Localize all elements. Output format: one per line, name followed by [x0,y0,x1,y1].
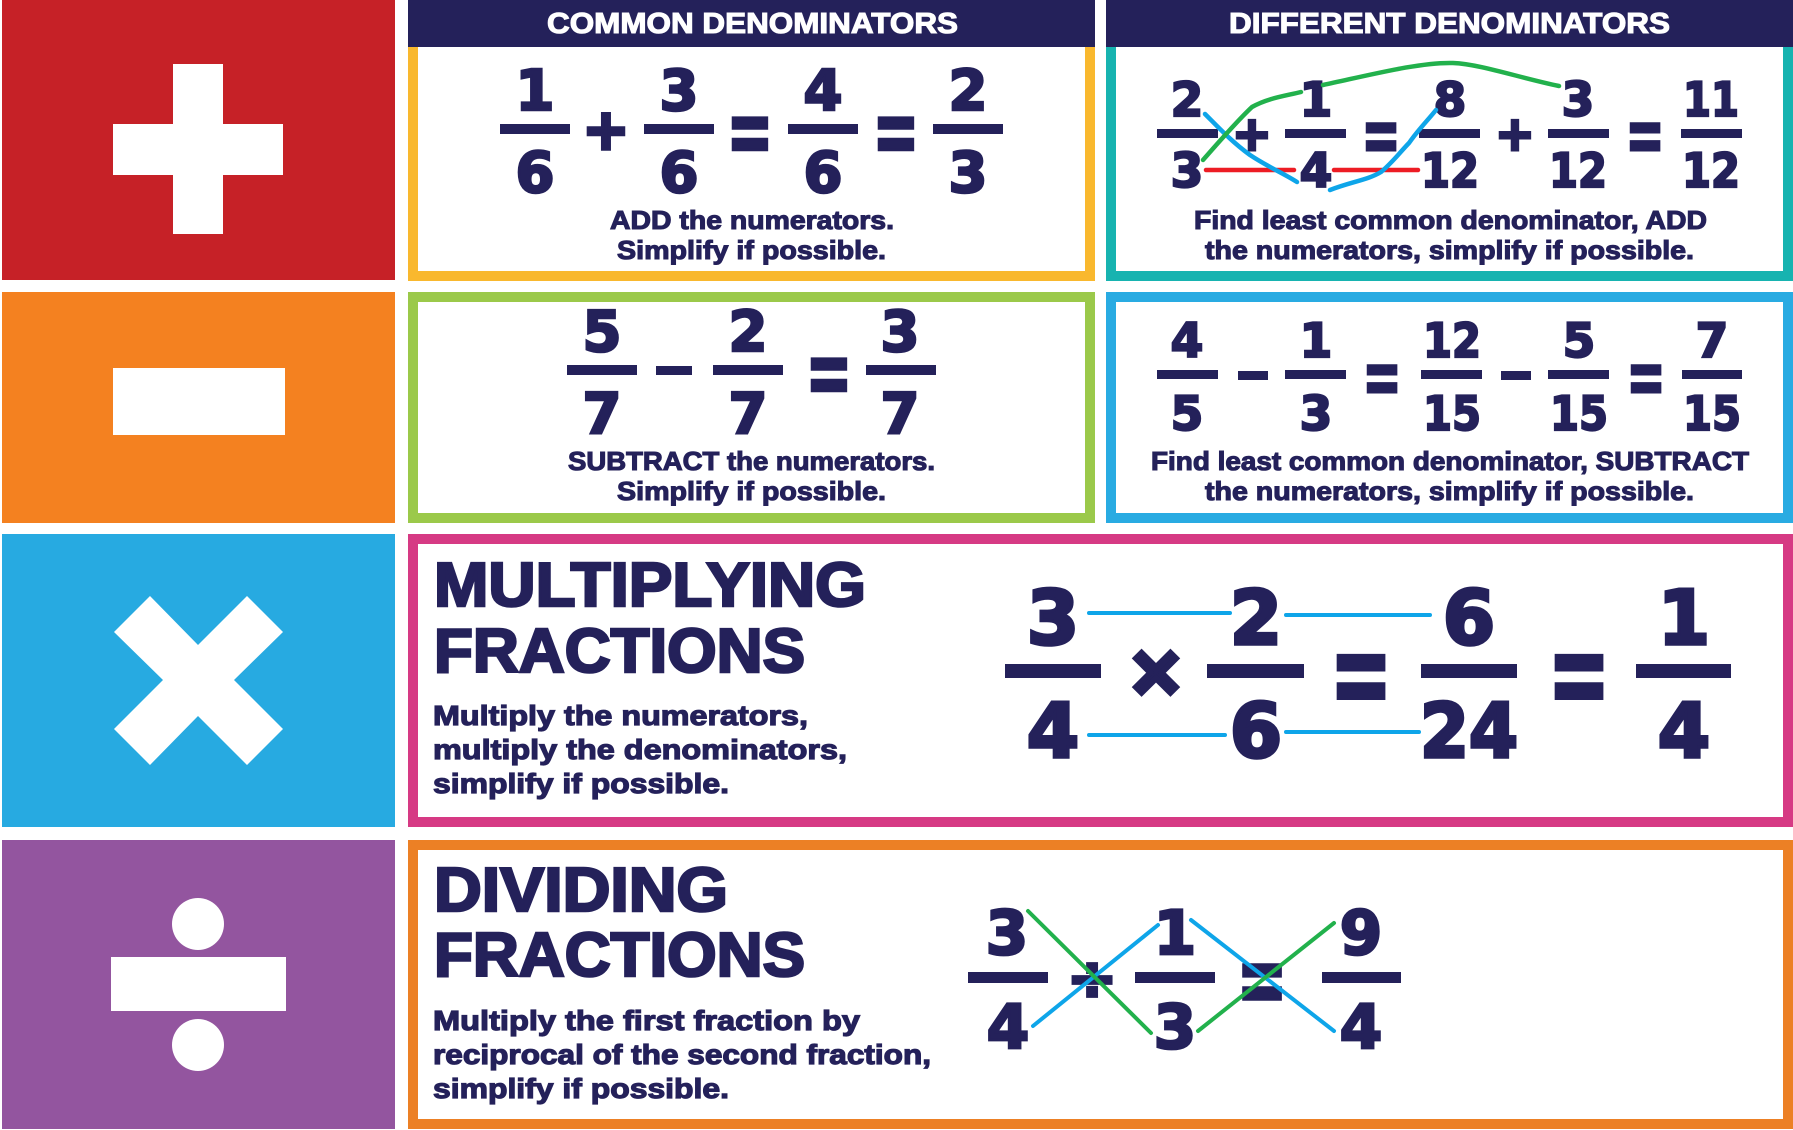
equation: 4/5 - 1/3 = 12/15 - 5/15 = 7/15: 5 [1563,314,1595,369]
equation: 3/4 x 2/6 = 6/24 = 1/4: 2 [1230,574,1282,662]
equation: 2/3 + 1/4 = 8/12 + 3/12 = 11/12: 1 [1300,73,1332,128]
equation: 3/4 x 2/6 = 6/24 = 1/4: 6 [1443,574,1495,662]
caption: different denominators subtract instructions: Find least common denominator, SUBTRACT [1151,446,1749,476]
equation: 2/3 + 1/4 = 8/12 + 3/12 = 11/12: + [1232,107,1272,162]
equation: 1/6 + 3/6 = 4/6 = 2/3: 6 [804,141,842,206]
caption: different denominators add instructions [1194,205,1707,265]
panel: addition symbol [2,0,395,280]
equation: 1/6 + 3/6 = 4/6 = 2/3: + [583,98,629,163]
equation: 3/4 ÷ 1/3 = 9/4: ÷ [1066,943,1118,1014]
panel: subtraction symbol [2,292,395,523]
annotation: cross-multiplication lines [1028,911,1334,1033]
panel: dividing fractions [413,840,1793,1129]
equation: 5/7 - 2/7 = 3/7: = [806,318,852,428]
equation: 4/5 - 1/3 = 12/15 - 5/15 = 7/15: 7 [1696,314,1728,369]
text: multiplying instructions: multiply the denominators, [433,734,847,765]
equation: 3/4 x 2/6 = 6/24 = 1/4: = [1548,599,1610,747]
header: common denominators [408,0,1095,47]
equation: 3/4 x 2/6 = 6/24 = 1/4: 1 [1658,574,1710,662]
equation: 2/3 + 1/4 = 8/12 + 3/12 = 11/12: 3 [1171,144,1203,199]
caption: different denominators add instructions: Find least common denominator, ADD [1194,205,1707,235]
header: different denominators [1106,0,1793,47]
heading: dividing fractions: DIVIDING [434,856,728,925]
equation: 2/3 + 1/4 = 8/12 + 3/12 = 11/12: 12 [1549,144,1607,199]
equation: 2/3 + 1/4 = 8/12 + 3/12 = 11/12: 12 [1421,144,1479,199]
equation: 2/3 + 1/4 = 8/12 + 3/12 = 11/12 [1157,73,1742,199]
equation: 3/4 ÷ 1/3 = 9/4 [968,898,1401,1063]
equation: 2/3 + 1/4 = 8/12 + 3/12 = 11/12: 3 [1562,73,1594,128]
equation: 3/4 ÷ 1/3 = 9/4: 4 [987,992,1029,1063]
equation: 1/6 + 3/6 = 4/6 = 2/3: 3 [949,141,987,206]
equation: 5/7 - 2/7 = 3/7: 3 [881,300,919,365]
equation: 3/4 x 2/6 = 6/24 = 1/4: 24 [1420,687,1518,775]
panel: division symbol [2,840,395,1129]
equation: 3/4 x 2/6 = 6/24 = 1/4: × [1128,632,1184,711]
equation: 1/6 + 3/6 = 4/6 = 2/3: = [727,77,773,187]
equation: 4/5 - 1/3 = 12/15 - 5/15 = 7/15: 15 [1683,387,1741,442]
equation: 2/3 + 1/4 = 8/12 + 3/12 = 11/12: 11 [1683,73,1739,128]
text: multiplying instructions: Multiply the numerators, [433,700,808,731]
equation: 1/6 + 3/6 = 4/6 = 2/3: 2 [949,59,987,124]
equation: 4/5 - 1/3 = 12/15 - 5/15 = 7/15: 5 [1171,387,1203,442]
text: multiplying instructions [433,700,847,799]
equation: 3/4 x 2/6 = 6/24 = 1/4: 3 [1027,574,1079,662]
equation: 4/5 - 1/3 = 12/15 - 5/15 = 7/15: 4 [1171,314,1203,369]
equation: 4/5 - 1/3 = 12/15 - 5/15 = 7/15: 12 [1423,314,1481,369]
equation: 4/5 - 1/3 = 12/15 - 5/15 = 7/15 [1157,314,1742,442]
caption: subtract instructions: SUBTRACT the numerators. [568,446,935,476]
caption: different denominators add instructions: the numerators, simplify if possible. [1205,235,1694,265]
annotation: straight multiplication lines [1089,613,1430,735]
equation: 2/3 + 1/4 = 8/12 + 3/12 = 11/12: 2 [1171,73,1203,128]
equation: 3/4 ÷ 1/3 = 9/4: = [1236,919,1288,1040]
equation: 2/3 + 1/4 = 8/12 + 3/12 = 11/12: = [1625,89,1665,181]
equation: 1/6 + 3/6 = 4/6 = 2/3: 1 [516,59,554,124]
equation: 3/4 x 2/6 = 6/24 = 1/4 [1005,574,1731,775]
equation: 5/7 - 2/7 = 3/7: 7 [583,382,621,447]
equation: 3/4 ÷ 1/3 = 9/4: 1 [1154,898,1196,969]
caption: add instructions: Simplify if possible. [617,235,886,265]
header: common denominators: COMMON DENOMINATORS [547,8,958,40]
equation: 3/4 ÷ 1/3 = 9/4: 3 [1154,992,1196,1063]
equation: 5/7 - 2/7 = 3/7: 2 [729,300,767,365]
equation: 4/5 - 1/3 = 12/15 - 5/15 = 7/15: 15 [1423,387,1481,442]
equation: 1/6 + 3/6 = 4/6 = 2/3: 6 [516,141,554,206]
heading: multiplying fractions: MULTIPLYING [434,551,866,620]
equation: 2/3 + 1/4 = 8/12 + 3/12 = 11/12: 12 [1682,144,1740,199]
equation: 3/4 x 2/6 = 6/24 = 1/4: 4 [1027,687,1079,775]
panel: different denominators addition [1106,0,1793,281]
heading: multiplying fractions: FRACTIONS [434,617,805,686]
equation: 4/5 - 1/3 = 12/15 - 5/15 = 7/15: 3 [1300,387,1332,442]
panel: multiplication symbol [2,534,395,827]
equation: 1/6 + 3/6 = 4/6 = 2/3: 3 [660,59,698,124]
equation: 3/4 x 2/6 = 6/24 = 1/4: 4 [1658,687,1710,775]
heading: multiplying fractions [434,551,866,686]
caption: different denominators subtract instructions [1151,446,1749,506]
equation: 1/6 + 3/6 = 4/6 = 2/3 [500,59,1003,206]
equation: 1/6 + 3/6 = 4/6 = 2/3: = [873,77,919,187]
equation: 1/6 + 3/6 = 4/6 = 2/3: 4 [804,59,842,124]
equation: 3/4 ÷ 1/3 = 9/4: 9 [1340,898,1382,969]
text: dividing instructions: Multiply the first fraction by [433,1005,860,1036]
equation: 3/4 ÷ 1/3 = 9/4: 4 [1340,992,1382,1063]
annotation: cross-multiplication lines [1203,63,1559,190]
equation: 2/3 + 1/4 = 8/12 + 3/12 = 11/12: + [1495,107,1535,162]
text: dividing instructions: simplify if possible. [433,1073,729,1104]
caption: subtract instructions: Simplify if possible. [617,476,886,506]
equation: 4/5 - 1/3 = 12/15 - 5/15 = 7/15: = [1362,331,1402,423]
heading: dividing fractions: FRACTIONS [434,921,805,990]
equation: 5/7 - 2/7 = 3/7 [567,300,936,447]
equation: 2/3 + 1/4 = 8/12 + 3/12 = 11/12: 8 [1434,73,1466,128]
text: multiplying instructions: simplify if possible. [433,768,729,799]
equation: 4/5 - 1/3 = 12/15 - 5/15 = 7/15: 1 [1300,314,1332,369]
caption: add instructions [610,205,894,265]
equation: 4/5 - 1/3 = 12/15 - 5/15 = 7/15: = [1626,331,1666,423]
equation: 1/6 + 3/6 = 4/6 = 2/3: 6 [660,141,698,206]
caption: subtract instructions [568,446,935,506]
equation: 2/3 + 1/4 = 8/12 + 3/12 = 11/12: = [1361,89,1401,181]
panel: multiplying fractions [413,534,1793,827]
equation: 4/5 - 1/3 = 12/15 - 5/15 = 7/15: 15 [1550,387,1608,442]
equation: 3/4 x 2/6 = 6/24 = 1/4: = [1330,599,1392,747]
heading: dividing fractions [434,856,805,990]
equation: 2/3 + 1/4 = 8/12 + 3/12 = 11/12: 4 [1300,144,1332,199]
caption: add instructions: ADD the numerators. [610,205,894,235]
text: dividing instructions [433,1005,931,1104]
equation: 5/7 - 2/7 = 3/7: 7 [881,382,919,447]
panel: different denominators subtraction [1111,292,1793,523]
equation: 3/4 ÷ 1/3 = 9/4: 3 [986,898,1028,969]
panel: common denominators subtraction [413,297,1090,518]
text: dividing instructions: reciprocal of the second fraction, [433,1039,931,1070]
equation: 5/7 - 2/7 = 3/7: 5 [583,300,621,365]
equation: 5/7 - 2/7 = 3/7: 7 [729,382,767,447]
caption: different denominators subtract instructions: the numerators, simplify if possible. [1205,476,1694,506]
panel: common denominators addition [408,0,1095,276]
equation: 3/4 x 2/6 = 6/24 = 1/4: 6 [1230,687,1282,775]
header: different denominators: DIFFERENT DENOMINATORS [1229,8,1670,40]
